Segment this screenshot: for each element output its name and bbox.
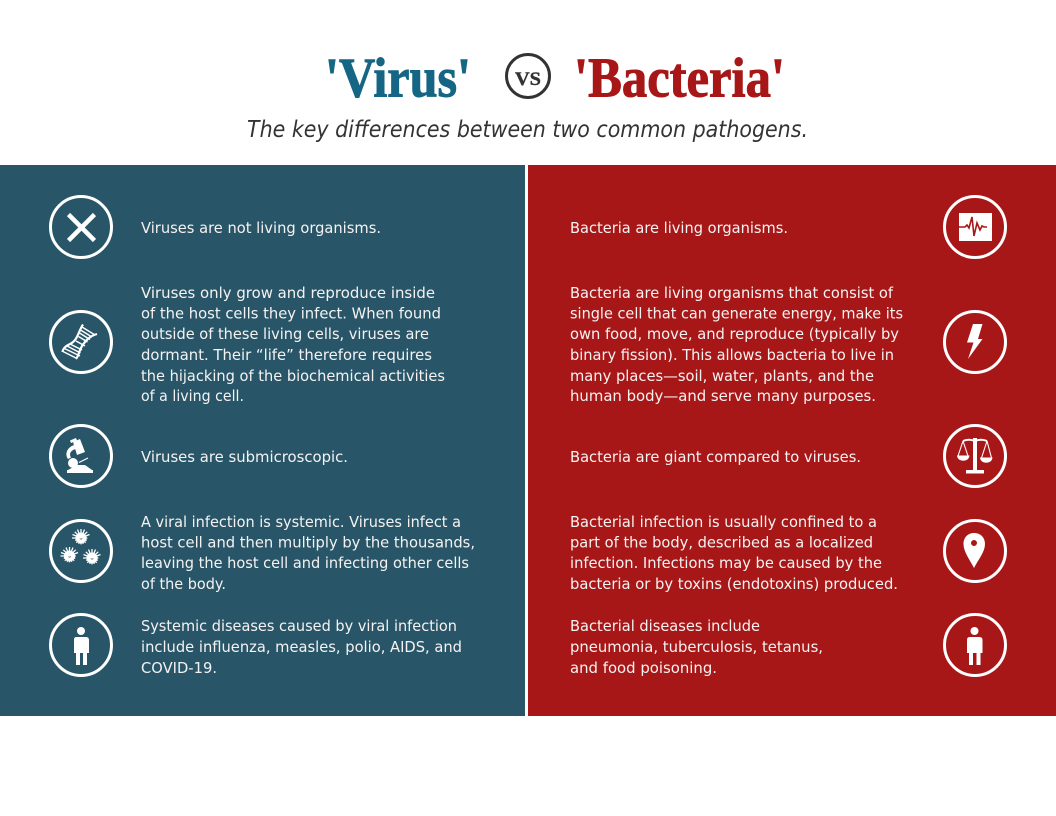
text: host cells: outside of these living cells, viruses are bbox=[141, 325, 429, 343]
text: systemic: leaving the host cell and infecting other cells bbox=[141, 554, 469, 572]
text: localized: Bacterial infection is usually confined to a bbox=[570, 513, 877, 531]
panel: bacteria bbox=[528, 165, 1056, 716]
icon: vs badge bbox=[506, 54, 550, 98]
text: submicroscopic: Viruses are submicroscopic. bbox=[141, 448, 348, 466]
text: bacteria detail bbox=[570, 284, 903, 405]
text: systemic: host cell and then multiply by the thousands, bbox=[141, 534, 475, 552]
icon: map pin bbox=[944, 520, 1006, 582]
text: systemic: of the body. bbox=[141, 575, 226, 593]
text: localized: infection. Infections may be caused by the bbox=[570, 554, 882, 572]
text: bacteria detail: many places—soil, water, plants, and the bbox=[570, 367, 874, 385]
text: bacterial diseases bbox=[570, 617, 823, 677]
text: host cells: of the host cells they infect. When found bbox=[141, 304, 441, 322]
text: systemic diseases: COVID-19. bbox=[141, 659, 217, 677]
text: bacterial diseases: and food poisoning. bbox=[570, 659, 717, 677]
title: 'Virus' bbox=[325, 48, 471, 110]
text: living: Bacteria are living organisms. bbox=[570, 219, 788, 237]
text: localized: bacteria or by toxins (endotoxins) produced. bbox=[570, 575, 898, 593]
icon: heart monitor bbox=[944, 196, 1006, 258]
text: host cells: dormant. Their “life” therefore requires bbox=[141, 346, 432, 364]
title: 'Bacteria' bbox=[574, 48, 785, 110]
icon: person bbox=[50, 614, 112, 676]
text: localized: part of the body, described as a localized bbox=[570, 534, 873, 552]
icon: virus particles bbox=[50, 520, 112, 582]
text: bacterial diseases: pneumonia, tuberculosis, tetanus, bbox=[570, 638, 823, 656]
icon: vs badge: VS bbox=[515, 69, 541, 90]
text: host cells bbox=[141, 284, 445, 405]
text: localized bbox=[570, 513, 898, 593]
text: systemic bbox=[141, 513, 475, 593]
title bbox=[325, 48, 785, 110]
subtitle: The key differences between two common pathogens. bbox=[247, 117, 808, 143]
text: bacteria detail: own food, move, and reproduce (typically by bbox=[570, 325, 899, 343]
text: host cells: the hijacking of the biochemical activities bbox=[141, 367, 445, 385]
panel: virus bbox=[0, 165, 525, 716]
icon: scales bbox=[944, 426, 1006, 486]
text: systemic diseases bbox=[141, 617, 462, 677]
text: bacteria detail: Bacteria are living organisms that consist of bbox=[570, 284, 894, 302]
text: host cells: Viruses only grow and reproduce inside bbox=[141, 284, 435, 302]
text: host cells: of a living cell. bbox=[141, 387, 244, 405]
icon: microscope bbox=[50, 426, 112, 486]
text: bacteria detail: binary fission). This allows bacteria to live in bbox=[570, 346, 894, 364]
text: not living: Viruses are not living organisms. bbox=[141, 219, 381, 237]
text: bacteria detail: human body—and serve many purposes. bbox=[570, 387, 876, 405]
icon: dna bbox=[50, 312, 112, 372]
text: systemic diseases: include influenza, measles, polio, AIDS, and bbox=[141, 638, 462, 656]
text: systemic diseases: Systemic diseases caused by viral infection bbox=[141, 617, 457, 635]
icon: lightning bolt bbox=[944, 312, 1006, 372]
text: giant: Bacteria are giant compared to viruses. bbox=[570, 448, 861, 466]
text: bacterial diseases: Bacterial diseases include bbox=[570, 617, 760, 635]
text: systemic: A viral infection is systemic. Viruses infect a bbox=[141, 513, 461, 531]
icon: person bbox=[944, 614, 1006, 676]
text: bacteria detail: single cell that can generate energy, make its bbox=[570, 304, 903, 322]
icon: cross bbox=[50, 196, 112, 258]
